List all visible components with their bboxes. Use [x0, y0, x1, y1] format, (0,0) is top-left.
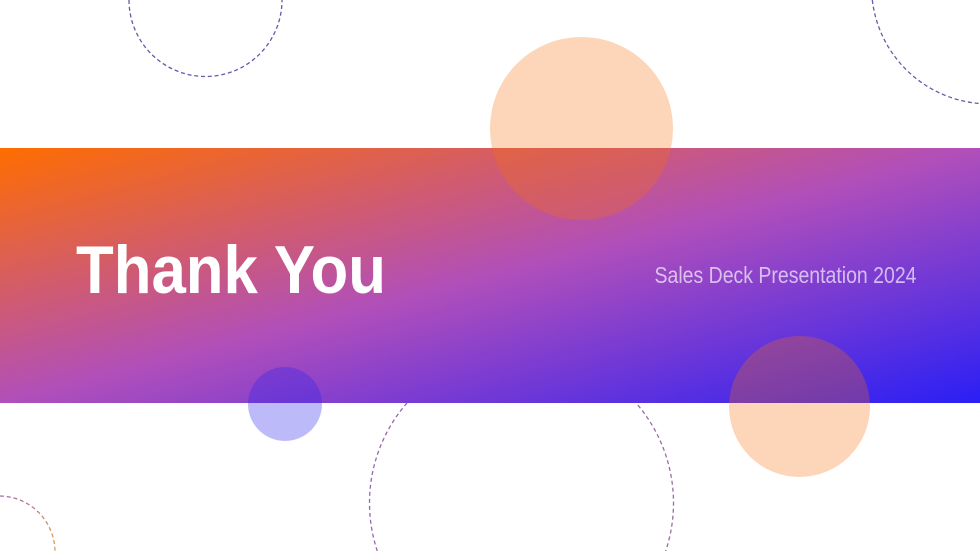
circle: small blue: [248, 367, 322, 441]
dashed circle: bottom left: [0, 496, 55, 551]
gradient band: [0, 148, 980, 403]
title: Thank You: [76, 232, 386, 308]
dashed circle: top right: [872, 0, 980, 104]
dashed circle: bottom centre: [369, 351, 674, 551]
circle: peach lower right: [729, 336, 870, 477]
dashed circle: top left: [129, 0, 282, 76]
subtitle: Sales Deck Presentation 2024: [654, 262, 917, 288]
circle: large peach top: [490, 37, 673, 220]
